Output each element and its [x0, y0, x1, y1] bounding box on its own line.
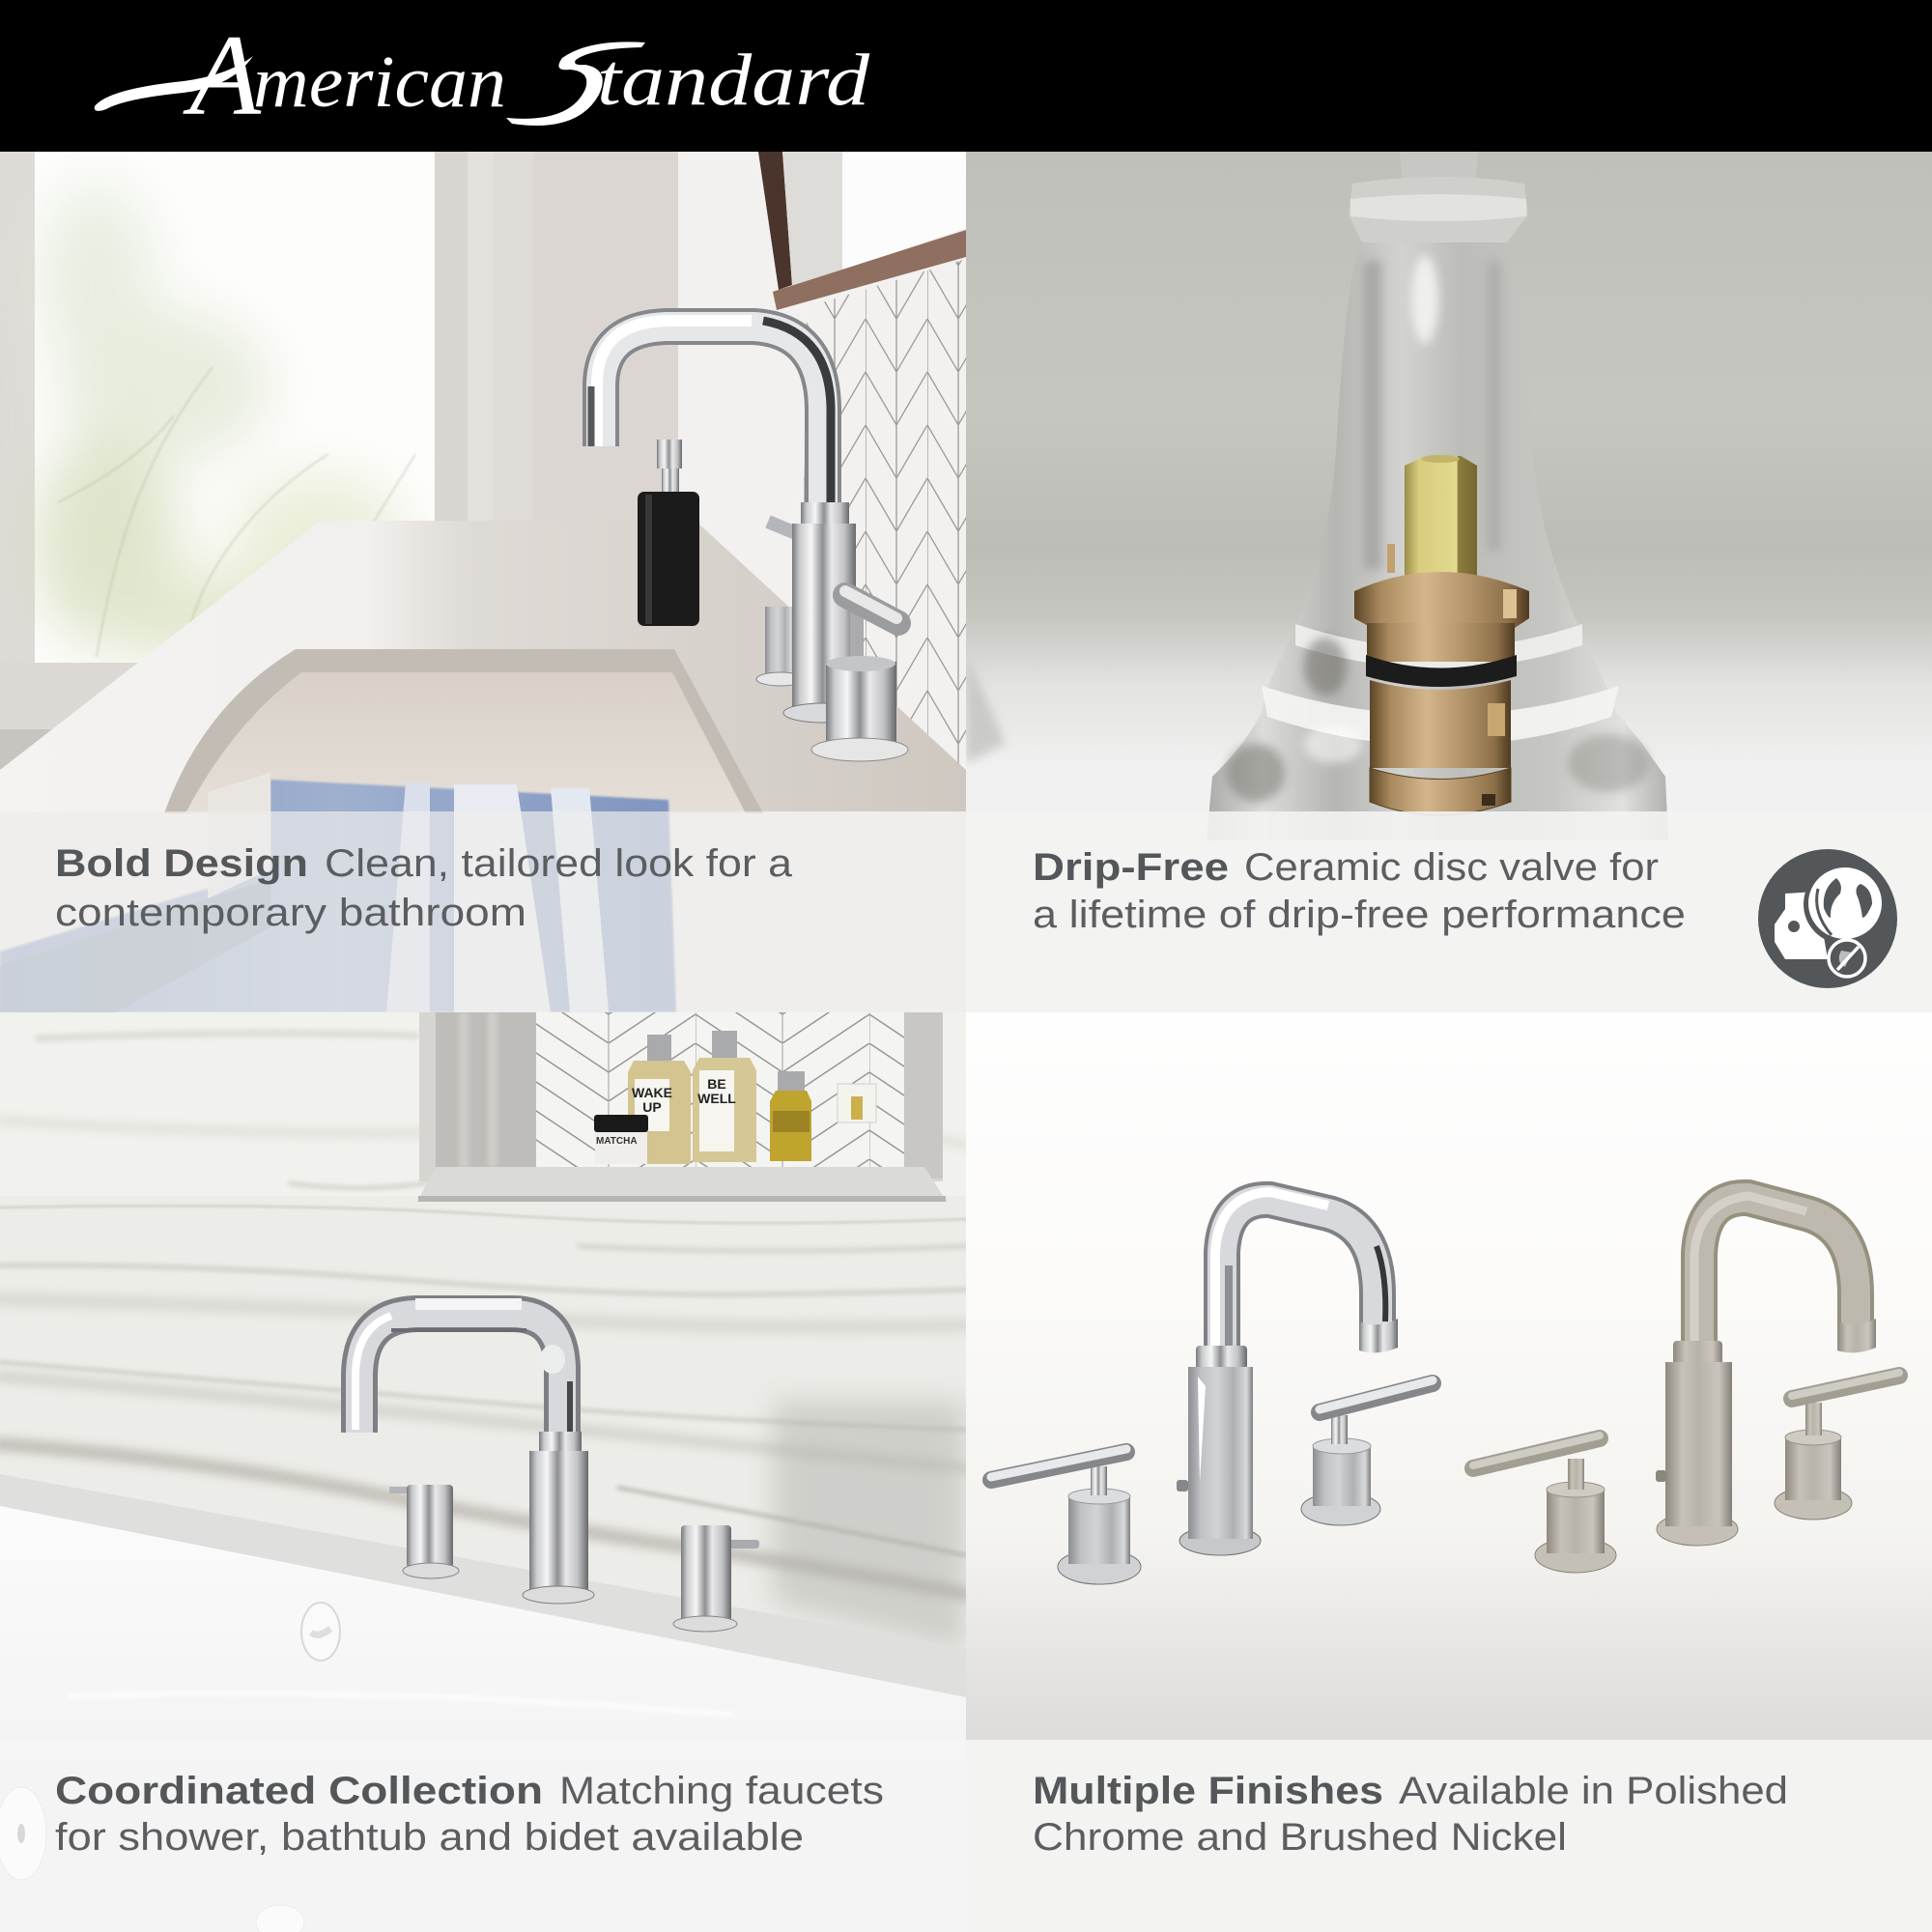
faucet: chrome widespread	[591, 321, 908, 761]
caption background	[966, 1740, 1932, 1932]
body	[1656, 1341, 1738, 1546]
tub faucet	[355, 1304, 759, 1632]
caption: multiple finishes: Available in Polished	[1399, 1770, 1788, 1812]
bottle: wake up: UP	[642, 1099, 662, 1115]
bottle: wake up: WAKE	[632, 1085, 672, 1100]
caption background	[0, 1740, 966, 1932]
caption: bold design: Clean, tailored look for a	[325, 842, 793, 885]
jar: matcha: MATCHA	[596, 1136, 638, 1147]
caption: drip-free: a lifetime of drip-free performance	[1033, 894, 1686, 936]
panel: drip-free valve cutaway	[966, 152, 1932, 1012]
caption: bold design: Bold Design	[55, 842, 308, 885]
bottle: wake up	[628, 1035, 691, 1164]
sink	[164, 649, 763, 813]
caption: bold design: contemporary bathroom	[55, 892, 526, 934]
o-ring	[1366, 655, 1517, 687]
bottles	[594, 1031, 876, 1164]
marble veining	[0, 1012, 966, 1594]
brass ceramic cartridge	[1354, 455, 1529, 815]
bottle: be well	[693, 1031, 756, 1162]
nozzle	[1837, 1319, 1876, 1352]
wall and pilaster	[435, 152, 678, 538]
bottle: be well: WELL	[697, 1091, 736, 1106]
header bar	[0, 0, 1932, 152]
mirror and wooden frame	[758, 152, 966, 310]
side reflection	[966, 657, 1005, 763]
bottle: amber oil	[770, 1071, 811, 1161]
spout body	[523, 1432, 594, 1604]
spout	[1694, 1196, 1856, 1348]
hex stem	[1405, 455, 1477, 576]
spout	[355, 1304, 570, 1449]
logo: American Standard: A	[183, 11, 262, 139]
panel: multiple finishes product shot	[966, 1012, 1932, 1932]
caption: drip-free: Ceramic disc valve for	[1244, 846, 1659, 889]
left handle behind	[755, 516, 792, 686]
jets under caption	[0, 1787, 304, 1932]
caption: coordinated collection: Coordinated Collection	[55, 1770, 543, 1812]
caption: multiple finishes	[1033, 1770, 1788, 1859]
flange	[1354, 544, 1529, 628]
jar: matcha	[594, 1115, 648, 1164]
icon: ceramic disc valve no-drip badge	[1758, 849, 1897, 988]
logo: American Standard: tandard	[597, 40, 870, 121]
jet	[301, 1603, 340, 1661]
polished chrome faucet set	[991, 1192, 1433, 1584]
tile niche with shelf	[417, 1012, 947, 1202]
caption background	[1207, 811, 1668, 840]
countertop	[0, 521, 966, 811]
caption: multiple finishes: Multiple Finishes	[1033, 1770, 1383, 1812]
caption: multiple finishes: Chrome and Brushed Nickel	[1033, 1816, 1567, 1859]
caption background	[0, 811, 763, 1012]
right handle	[673, 1525, 759, 1632]
right handle	[811, 591, 908, 761]
bottle: be well: BE	[707, 1076, 726, 1092]
body	[783, 502, 863, 723]
body	[1177, 1346, 1261, 1555]
right handle	[1775, 1373, 1899, 1520]
panel: bold design bathroom sink	[0, 152, 966, 1012]
spout	[591, 321, 831, 507]
panel: coordinated collection bathtub	[0, 1012, 966, 1932]
spout	[1215, 1192, 1385, 1352]
left handle	[1473, 1435, 1616, 1573]
logo: American Standard	[95, 11, 870, 139]
wall shadow	[773, 1401, 966, 1652]
left handle	[991, 1449, 1141, 1584]
nozzle	[1359, 1319, 1398, 1352]
logo: American Standard: merican	[253, 42, 506, 123]
caption: coordinated collection	[55, 1770, 884, 1859]
left handle	[389, 1485, 459, 1578]
caption: coordinated collection: for shower, bathtub and bidet available	[55, 1816, 804, 1859]
brushed nickel faucet set	[1473, 1196, 1899, 1573]
chrome bell handle	[1207, 152, 1668, 840]
glass holder	[838, 1084, 876, 1122]
soap dispenser	[638, 440, 699, 626]
caption: drip-free	[1033, 846, 1686, 936]
window with trees	[0, 152, 437, 773]
tiled backsplash	[804, 260, 966, 763]
tub deck	[0, 1474, 966, 1710]
right handle	[1301, 1380, 1433, 1525]
caption: drip-free: Drip-Free	[1033, 846, 1229, 889]
towel	[0, 773, 676, 1012]
caption: bold design	[55, 842, 793, 934]
caption: coordinated collection: Matching faucets	[559, 1770, 884, 1812]
bathtub	[0, 1506, 966, 1932]
